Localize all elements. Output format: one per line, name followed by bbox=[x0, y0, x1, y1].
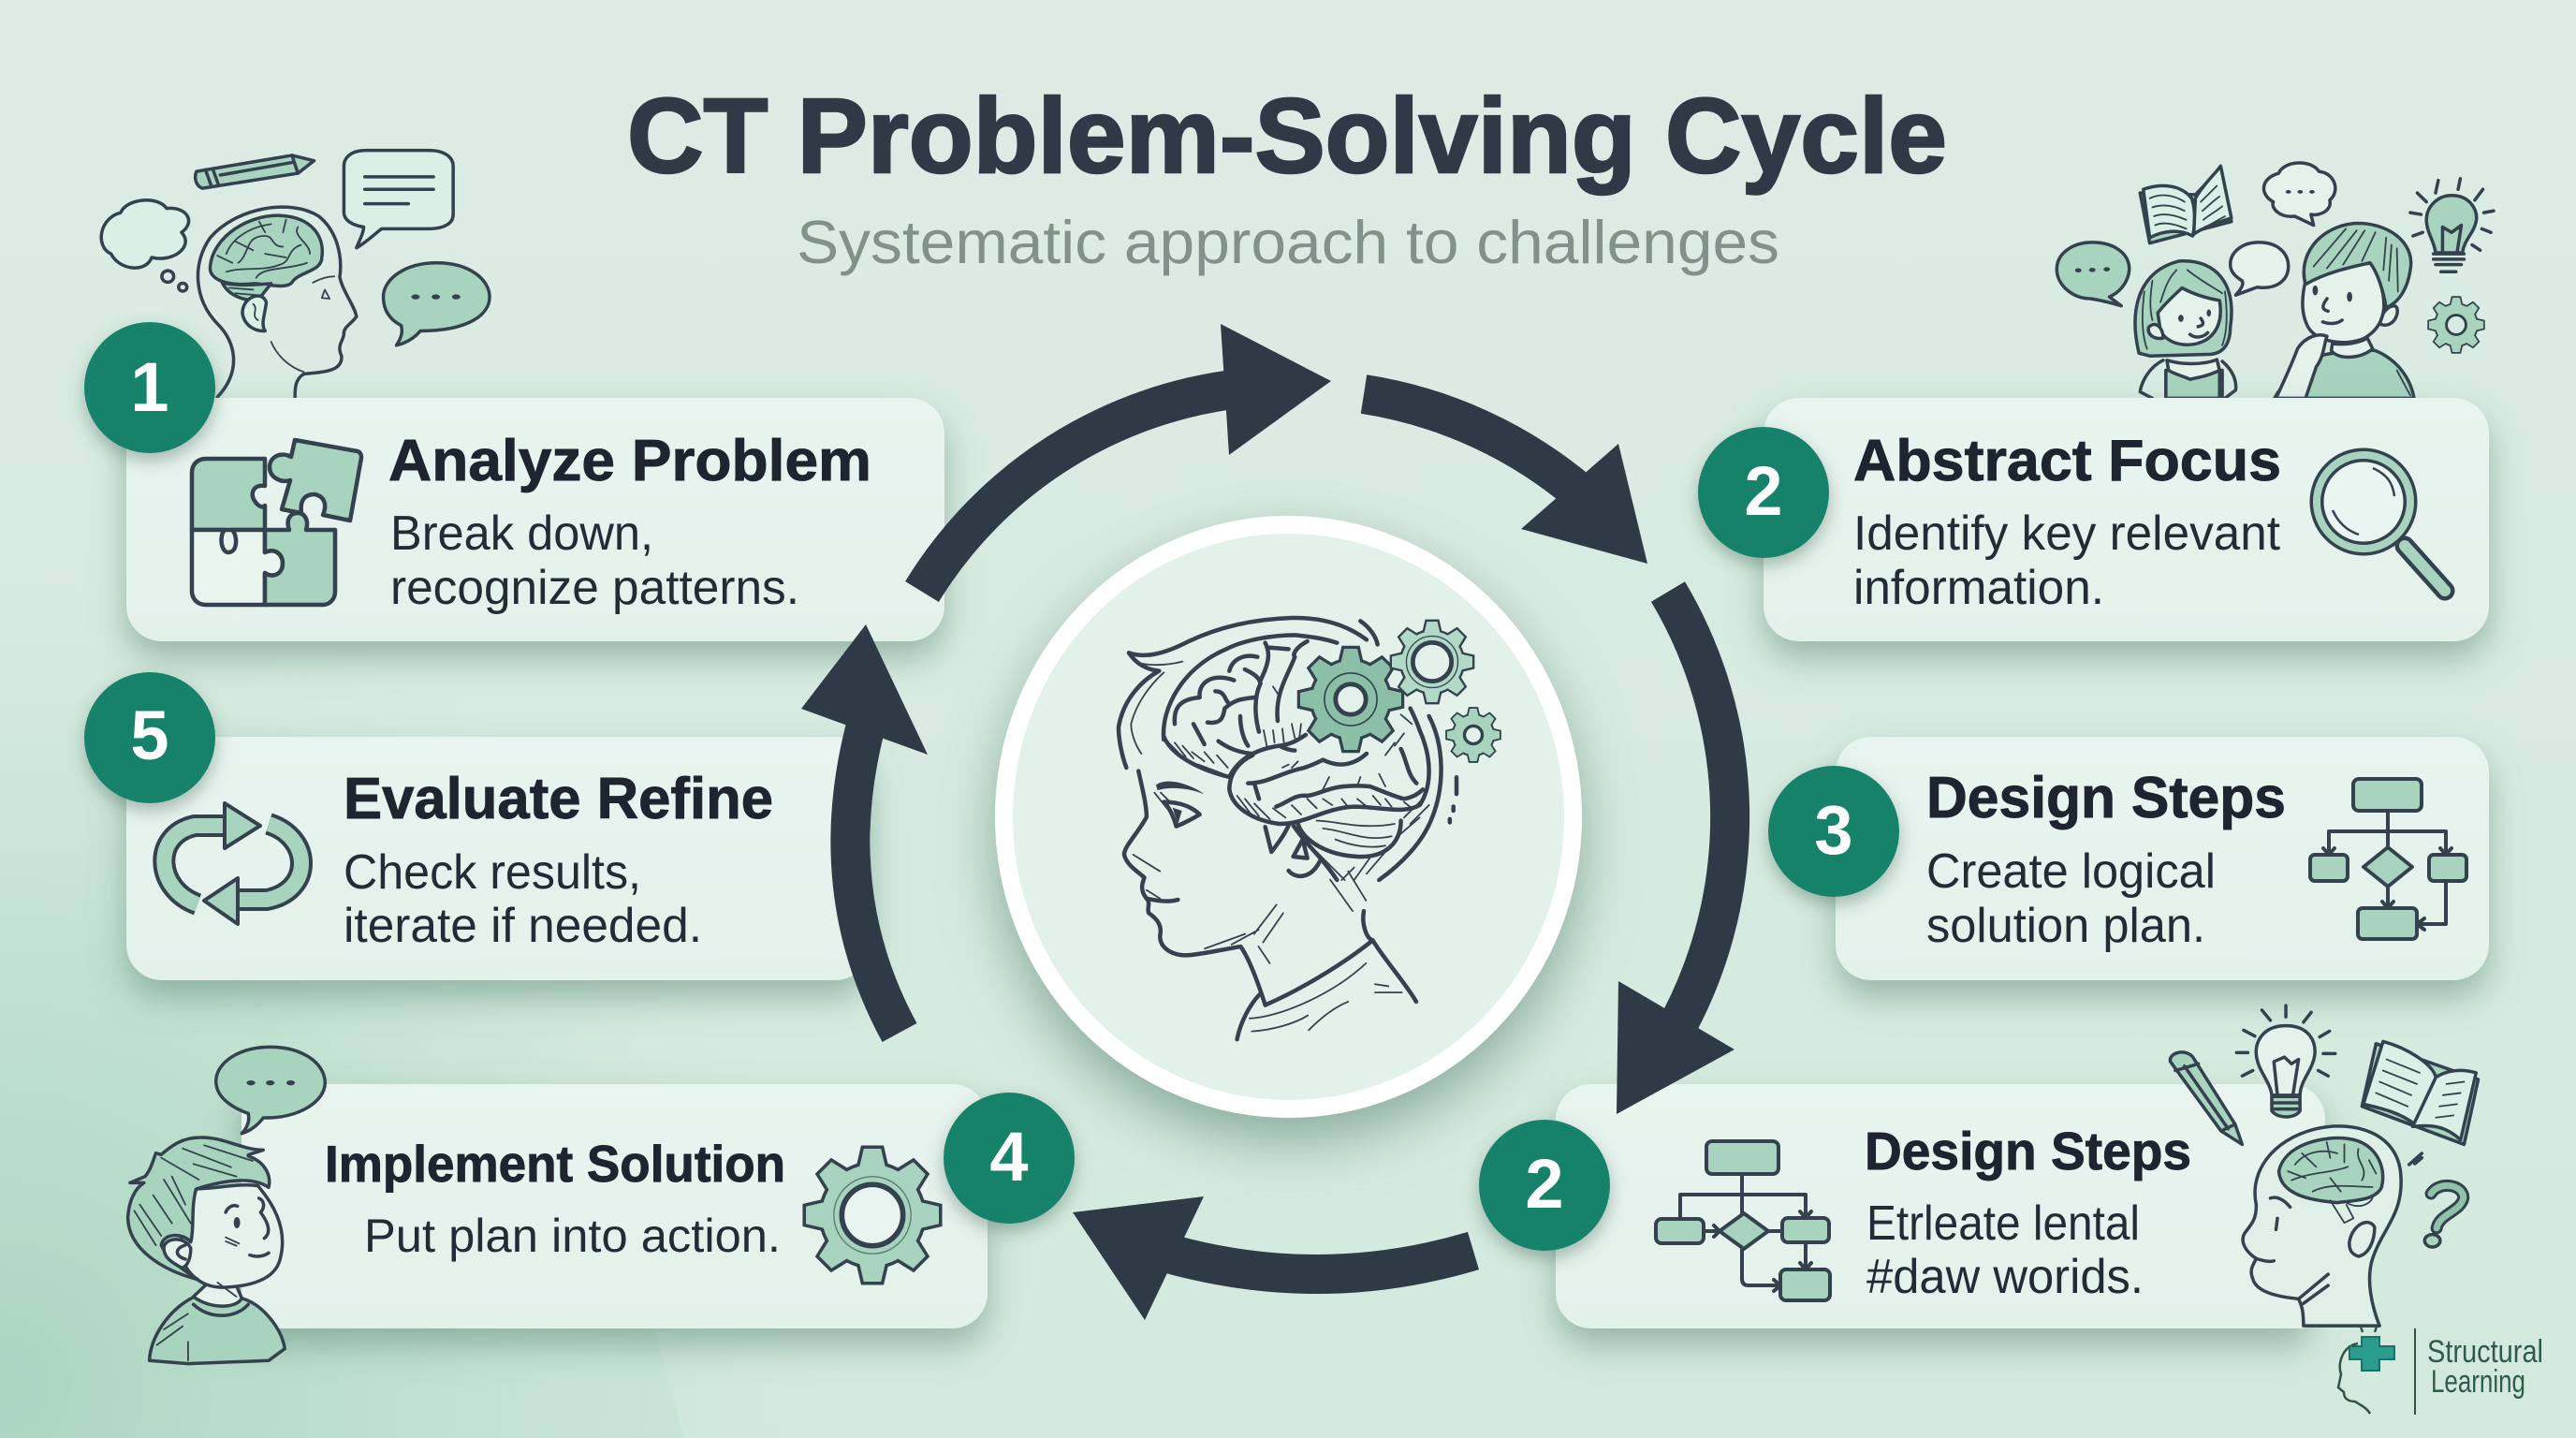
panel: design steps second bbox=[1556, 1084, 2325, 1328]
badge 3: 3 bbox=[1814, 791, 1853, 869]
arrow: bottom return bbox=[1073, 1196, 1473, 1320]
subtitle: Systematic approach to challenges bbox=[797, 208, 1779, 276]
neck bbox=[194, 1276, 242, 1306]
illustration: boy with speech bubble bbox=[128, 1047, 325, 1364]
lower face line art bbox=[1124, 771, 1456, 1039]
icon: light bulb bbox=[2410, 179, 2494, 271]
badge 5 bbox=[84, 672, 215, 803]
icon: flowchart bbox=[1656, 1141, 1830, 1300]
logo text: Structural bbox=[2427, 1334, 2543, 1370]
icon: cloud speech bubble bbox=[2263, 163, 2335, 226]
logo text bbox=[2427, 1334, 2543, 1400]
icon: magnifying glass bbox=[2317, 455, 2445, 591]
badge 2 second bbox=[1479, 1120, 1610, 1251]
body text: #daw worids. bbox=[1866, 1250, 2144, 1304]
illustration: central head with brain and gears bbox=[1119, 618, 1500, 1039]
arrow: analyze to abstract bbox=[922, 324, 1331, 592]
panel: evaluate refine bbox=[126, 737, 871, 980]
logo mark bbox=[2338, 1327, 2394, 1414]
background facet bbox=[356, 1329, 683, 1438]
body text: Put plan into action. bbox=[364, 1210, 781, 1262]
brain bbox=[2279, 1138, 2383, 1223]
icon: speech bubble bbox=[216, 1047, 325, 1134]
icon: empty speech bubble bbox=[2231, 242, 2289, 295]
body text: Identify key relevant bbox=[1853, 506, 2281, 561]
icon: brain head profile bbox=[198, 207, 357, 398]
body text: information. bbox=[1853, 561, 2104, 615]
icon: lightbulb bbox=[2236, 1005, 2335, 1117]
panel: analyze problem bbox=[126, 398, 944, 641]
illustration: two children with ideas bbox=[2056, 163, 2494, 398]
icon: pencil bbox=[2170, 1052, 2242, 1144]
panel: abstract focus bbox=[1764, 398, 2489, 641]
body text bbox=[344, 845, 702, 953]
icon: gear bbox=[806, 1149, 939, 1282]
icon: small gear top right bbox=[2429, 298, 2483, 352]
hair bbox=[128, 1137, 270, 1280]
icon: question mark bbox=[2409, 1153, 2464, 1247]
icon: thought cloud bbox=[101, 200, 189, 291]
body text bbox=[1853, 506, 2281, 615]
badge 4 bbox=[944, 1093, 1075, 1224]
body text bbox=[390, 506, 799, 615]
icon: book bbox=[2362, 1041, 2479, 1144]
illustration: thinking head with speech bubbles bbox=[101, 151, 490, 398]
body text: Create logical bbox=[1926, 844, 2216, 899]
icon: dots speech bubble bbox=[384, 263, 490, 345]
icon: refresh arrows bbox=[164, 803, 301, 924]
illustration: head with brain, bulb, pencil, book bbox=[2170, 1005, 2479, 1326]
badge 2 bbox=[1698, 427, 1829, 558]
face bbox=[180, 1185, 283, 1287]
illustration: thinking boy bbox=[2275, 224, 2414, 398]
icon: small speech bubble bbox=[2056, 242, 2130, 306]
heading: Implement Solution bbox=[325, 1135, 785, 1193]
panel: implement solution bbox=[242, 1084, 988, 1328]
badge 1: 1 bbox=[130, 348, 169, 426]
heading: Design Steps bbox=[1865, 1122, 2191, 1181]
ear bbox=[164, 1240, 191, 1268]
badge 1 bbox=[84, 322, 215, 453]
badge 3 bbox=[1768, 766, 1899, 897]
logo bbox=[2338, 1327, 2543, 1415]
panel: design steps bbox=[1836, 737, 2489, 980]
illustration: girl bbox=[2135, 261, 2236, 398]
logo divider bbox=[2414, 1328, 2416, 1415]
icon: open book bbox=[2140, 166, 2232, 243]
body text: iterate if needed. bbox=[344, 899, 702, 953]
logo text: Learning bbox=[2431, 1364, 2525, 1400]
body text bbox=[1866, 1196, 2144, 1304]
arrow: design down bbox=[1617, 592, 1734, 1114]
arrow: abstract to design bbox=[1364, 394, 1647, 564]
arrow: evaluate to analyze bbox=[801, 624, 928, 1033]
heading: Evaluate Refine bbox=[344, 767, 773, 831]
sweater bbox=[150, 1297, 285, 1364]
body text: Break down, bbox=[390, 506, 653, 561]
body text: recognize patterns. bbox=[390, 561, 799, 615]
gear: medium bbox=[1392, 622, 1472, 702]
icon: pencil bbox=[196, 155, 315, 188]
gear: large bbox=[1300, 649, 1401, 750]
head outline bbox=[2243, 1126, 2401, 1326]
icon: flowchart bbox=[2310, 779, 2466, 939]
icon: text speech bubble bbox=[344, 151, 453, 248]
badge 2: 2 bbox=[1744, 452, 1783, 530]
center circle bbox=[1003, 524, 1573, 1108]
icon: puzzle bbox=[192, 440, 361, 605]
body text bbox=[1926, 844, 2216, 953]
title: CT Problem-Solving Cycle bbox=[627, 77, 1947, 195]
brain and hair line art bbox=[1119, 618, 1442, 880]
badge 4: 4 bbox=[989, 1118, 1029, 1196]
ear and face bbox=[2256, 1197, 2375, 1303]
badge 5: 5 bbox=[130, 697, 169, 774]
heading: Design Steps bbox=[1926, 766, 2286, 830]
badge 2 second: 2 bbox=[1525, 1145, 1564, 1223]
body text: Check results, bbox=[344, 845, 641, 900]
body text: Etrleate lental bbox=[1866, 1196, 2140, 1251]
gear: small bbox=[1447, 709, 1500, 761]
facial features bbox=[135, 1145, 269, 1360]
heading: Analyze Problem bbox=[388, 429, 871, 493]
body text: solution plan. bbox=[1926, 899, 2205, 953]
heading: Abstract Focus bbox=[1853, 429, 2281, 493]
